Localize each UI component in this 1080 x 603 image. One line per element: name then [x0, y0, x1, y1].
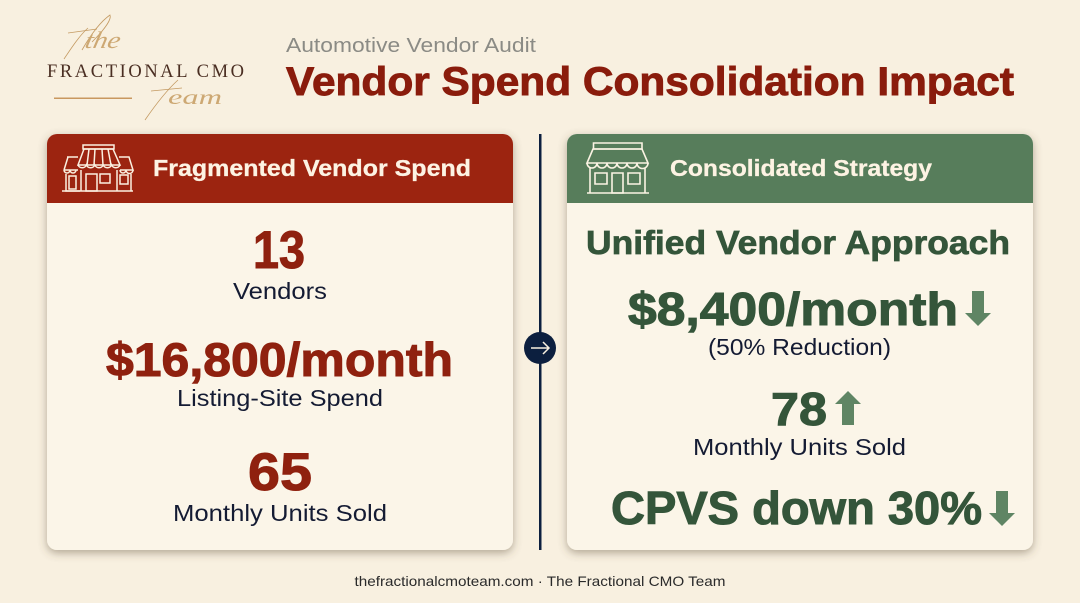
logo: The Fractional CMO Team [47, 15, 244, 120]
stat: vendors [233, 221, 327, 304]
stat: cpvs: CPVS down 30% [611, 482, 982, 534]
stat: monthly units sold: Monthly Units Sold [173, 500, 387, 526]
logo: The Fractional CMO Team: the [83, 27, 124, 54]
stat: vendors: 13 [253, 221, 305, 280]
divider with arrow [524, 134, 556, 550]
stat: units sold: Monthly Units Sold [693, 434, 906, 460]
panel header: consolidated [567, 134, 1033, 203]
panel heading: fragmented: Fragmented Vendor Spend [153, 155, 471, 181]
title: Vendor Spend Consolidation Impact [286, 60, 1014, 104]
stat: units sold [693, 383, 906, 460]
footer: thefractionalcmoteam.com · The Fractional CMO Team [354, 573, 726, 589]
stat: monthly spend: (50% Reduction) [708, 334, 891, 360]
logo: The Fractional CMO Team: eam [168, 85, 222, 109]
stat: listing-site spend: Listing-Site Spend [177, 385, 383, 411]
stat: vendors: Vendors [233, 278, 327, 304]
logo: The Fractional CMO Team: FRACTIONAL CMO [47, 62, 244, 82]
stat: units sold: 78 [771, 383, 827, 435]
stat: monthly units sold [173, 443, 387, 526]
stat: listing-site spend: $16,800/month [106, 333, 453, 386]
panel header: fragmented [47, 134, 513, 203]
heading: unified vendor approach: Unified Vendor Approach [586, 224, 1010, 261]
stat: monthly spend [628, 283, 991, 360]
panel: consolidated strategy [567, 134, 1033, 550]
stat: monthly spend: $8,400/month [628, 283, 958, 335]
subtitle: Automotive Vendor Audit [286, 35, 536, 57]
stat: listing-site spend [106, 333, 453, 411]
icon: down arrow [989, 491, 1015, 526]
icon: down arrow [965, 291, 991, 326]
panel heading: consolidated: Consolidated Strategy [670, 155, 932, 181]
panel: fragmented vendor spend [47, 134, 513, 550]
stat: monthly units sold: 65 [248, 443, 312, 502]
icon: single shop [587, 143, 649, 193]
icon: row of shops [62, 145, 133, 191]
icon: up arrow [835, 391, 861, 425]
